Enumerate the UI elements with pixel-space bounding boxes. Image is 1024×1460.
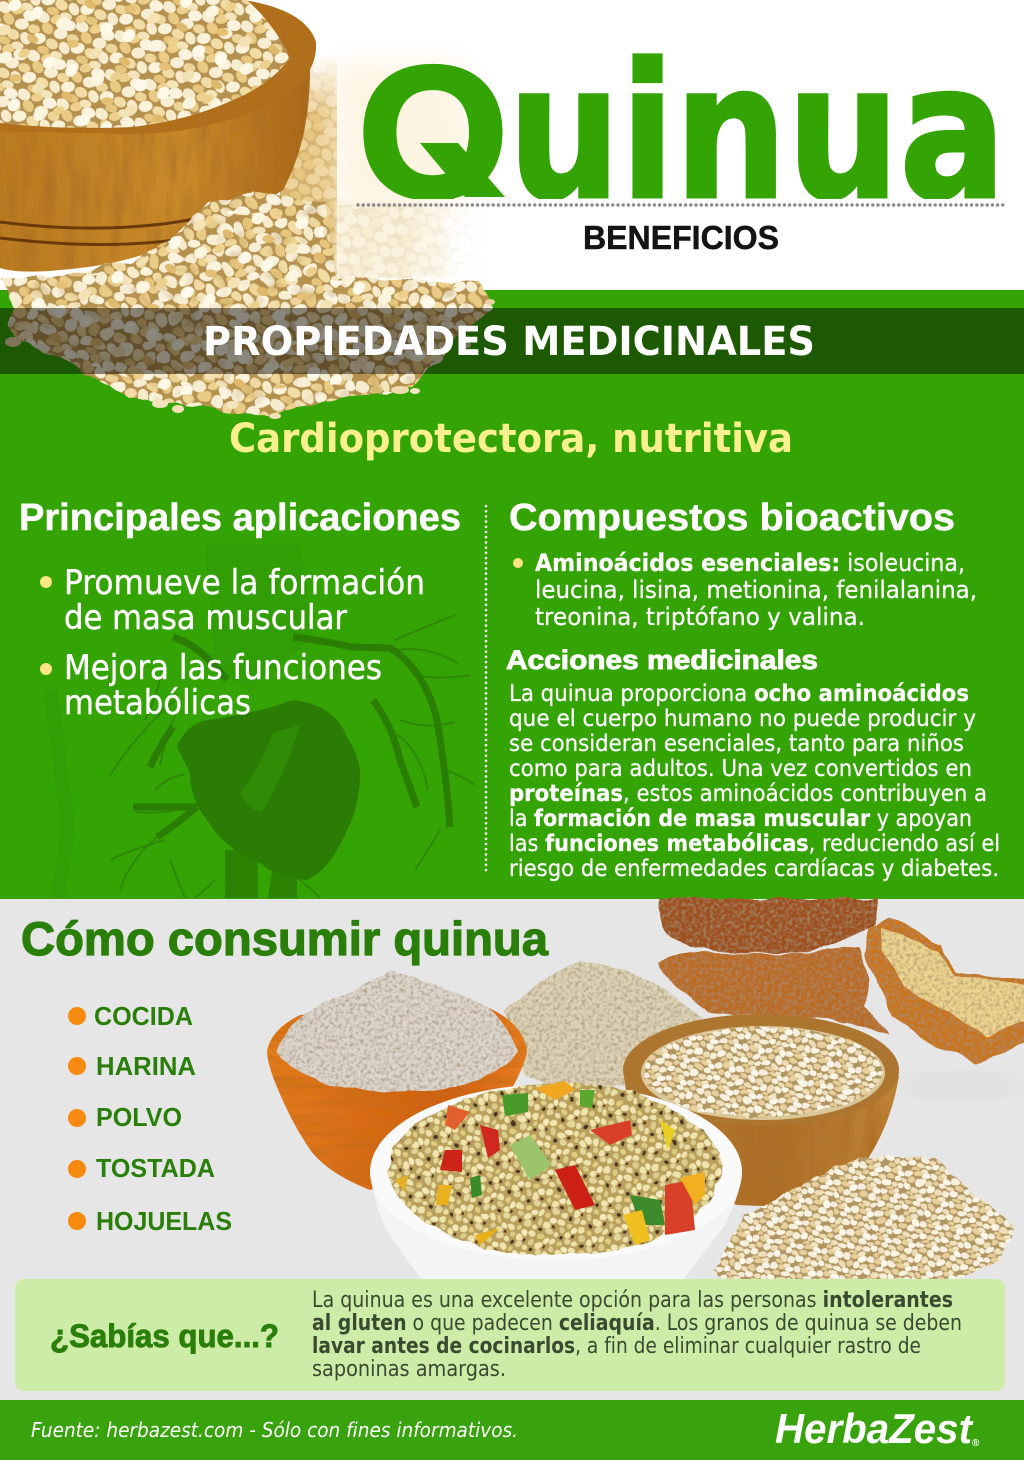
item: tostada: TOSTADA bbox=[96, 1153, 215, 1183]
band: propiedades medicinales bbox=[0, 308, 1024, 374]
bowl ridges bbox=[0, 218, 200, 245]
callout heading: ¿Sabías que...? bbox=[50, 1318, 279, 1354]
illustration: faded heart bbox=[50, 545, 475, 898]
footer bbox=[0, 1400, 1024, 1460]
item: cocida: COCIDA bbox=[94, 1001, 193, 1031]
title: Q bbox=[358, 28, 508, 237]
bullet 1 bbox=[40, 563, 425, 638]
heading: como consumir quinua: Cómo consumir quinua bbox=[21, 912, 549, 965]
fine vessels bbox=[110, 615, 475, 898]
text block: acciones medicinales bbox=[509, 681, 1000, 882]
arch and main vessels bbox=[133, 637, 450, 837]
quinoa patties bbox=[657, 899, 889, 1035]
text block: acciones medicinales: las funciones metabólicas, reduciendo así el bbox=[509, 831, 1000, 857]
white salad bowl bbox=[370, 1084, 742, 1279]
bullet: aminoacidos bbox=[513, 549, 977, 631]
callout text: al gluten o que padecen celiaquía. Los granos de quinua se deben bbox=[312, 1311, 962, 1336]
heading: Compuestos bioactivos bbox=[509, 497, 955, 539]
bullet 2: metabólicas bbox=[64, 683, 251, 723]
broken patty bbox=[864, 918, 1024, 1097]
band heading: PROPIEDADES MEDICINALES bbox=[203, 319, 815, 365]
aorta root bbox=[225, 850, 297, 898]
orange bowl with flour bbox=[267, 970, 527, 1190]
text block: acciones medicinales: que el cuerpo humano no puede producir y bbox=[509, 706, 976, 732]
heart body bbox=[177, 700, 360, 880]
dotted column divider bbox=[485, 506, 487, 872]
green section background bbox=[0, 290, 1024, 899]
item: harina: HARINA bbox=[96, 1051, 196, 1081]
panel: principales aplicaciones bbox=[19, 497, 461, 723]
text block: acciones medicinales: como para adultos. Una vez convertidos en bbox=[509, 756, 972, 782]
heart highlight bbox=[240, 725, 300, 812]
faint far-left vessel bbox=[50, 690, 67, 897]
grey consumption section background bbox=[0, 899, 1024, 1400]
logo: HerbaZest: ® bbox=[972, 1438, 980, 1449]
heading: Principales aplicaciones bbox=[19, 497, 461, 539]
item: polvo: POLVO bbox=[96, 1102, 182, 1132]
grains inside bowl bbox=[0, 0, 290, 128]
dotted divider under title bbox=[358, 203, 1003, 207]
callout: sabias que bbox=[15, 1279, 1005, 1391]
bullet 1: Promueve la formación bbox=[64, 563, 425, 603]
faded quinoa background behind title bbox=[280, 55, 490, 280]
quinoa salad bbox=[388, 1081, 722, 1255]
source note: Fuente: herbazest.com - Sólo con fines informativos. bbox=[31, 1418, 518, 1442]
bullet: aminoacidos: treonina, triptófano y valina. bbox=[535, 603, 865, 631]
text block: acciones medicinales: la formación de masa muscular y apoyan bbox=[509, 806, 972, 832]
bowl body bbox=[0, 70, 310, 272]
vegetable pieces bbox=[395, 1081, 705, 1245]
subheading: cardioprotectora: Cardioprotectora, nutritiva bbox=[229, 416, 793, 462]
subtitle: BENEFICIOS bbox=[583, 219, 779, 256]
callout text: La quinua es una excelente opción para las personas intolerantes bbox=[312, 1288, 953, 1313]
oat flake mound bbox=[504, 962, 703, 1090]
pile grain overlay bbox=[20, 208, 470, 395]
bullet: aminoacidos: Aminoácidos esenciales: isoleucina, bbox=[535, 549, 965, 577]
wooden bowl with quinoa bbox=[623, 1014, 899, 1207]
image: wooden bowl of quinoa bbox=[0, 0, 316, 272]
item: hojuelas: HOJUELAS bbox=[96, 1206, 232, 1236]
logo: HerbaZest: HerbaZest bbox=[775, 1405, 974, 1452]
text block: acciones medicinales: se consideran esenciales, tanto para niños bbox=[509, 731, 964, 757]
bullet 2 bbox=[40, 648, 382, 723]
callout text: saponinas amargas. bbox=[312, 1357, 506, 1382]
text block: acciones medicinales: La quinua proporciona ocho aminoácidos bbox=[509, 681, 969, 707]
grains overlay bbox=[0, 0, 290, 128]
title bbox=[363, 53, 995, 199]
quinoa grains pile bbox=[713, 1157, 1015, 1284]
bullet: aminoacidos: leucina, lisina, metionina, fenilalanina, bbox=[535, 576, 977, 604]
bowl rim bbox=[0, 0, 316, 134]
image: quinoa foods bbox=[267, 899, 1024, 1284]
panel: compuestos bioactivos bbox=[506, 497, 1000, 882]
bullet 2: Mejora las funciones bbox=[64, 648, 382, 688]
callout text bbox=[312, 1288, 962, 1382]
subheading: acciones medicinales: Acciones medicinales bbox=[506, 645, 818, 675]
text block: acciones medicinales: proteínas, estos aminoácidos contribuyen a bbox=[509, 781, 987, 807]
list: forms of consumption bbox=[68, 1001, 232, 1236]
faint upper aorta bbox=[205, 545, 315, 690]
image: pile of quinoa grains bbox=[0, 192, 495, 419]
callout text: lavar antes de cocinarlos, a fin de eliminar cualquier rastro de bbox=[312, 1334, 921, 1359]
bullet 1: de masa muscular bbox=[64, 598, 347, 638]
